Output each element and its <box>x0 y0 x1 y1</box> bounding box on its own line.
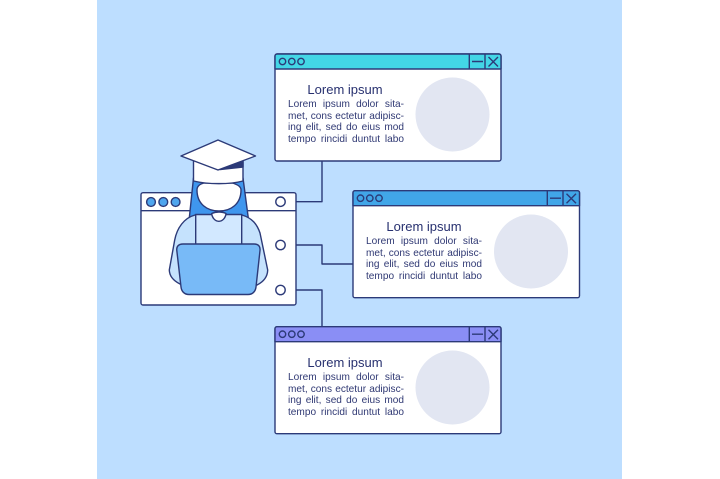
card 2 body text: Lorem ipsum dolor sita- <box>366 236 482 247</box>
mortarboard <box>181 140 256 170</box>
card 1 body text: ing elit, sed do eius mod <box>288 122 404 133</box>
card 3 body text <box>288 372 404 418</box>
card 3 text <box>288 355 404 418</box>
card 1 body text <box>288 99 404 144</box>
window card 1 <box>275 54 501 161</box>
card 2 body text: tempo rincidi duntut labo <box>366 270 482 282</box>
cap shadow <box>220 162 243 170</box>
card 2 body text <box>366 236 482 282</box>
torso <box>196 214 242 244</box>
main browser window <box>141 193 296 305</box>
window card 2 <box>353 191 580 298</box>
card 2 body text: ing elit, sed do eius mod <box>366 259 482 270</box>
card 3 heading: Lorem ipsum <box>307 355 383 370</box>
face <box>197 183 241 211</box>
card 3 body text: Lorem ipsum dolor sita- <box>288 372 404 383</box>
arms and shoulders <box>169 215 268 285</box>
graduate student figure <box>169 140 268 294</box>
card 2 heading: Lorem ipsum <box>386 219 462 234</box>
card 2 text <box>366 219 482 282</box>
card 1 body text: tempo rincidi duntut labo <box>288 134 404 144</box>
card 3 body text: tempo rincidi duntut labo <box>288 406 404 418</box>
card 1 text <box>288 82 404 144</box>
card 2 body text: met, cons ectetur adipisc- <box>366 248 482 258</box>
neck <box>212 212 226 221</box>
hair <box>189 178 248 218</box>
cap base <box>194 160 243 184</box>
laptop <box>177 244 260 294</box>
connector lines <box>285 161 353 326</box>
card 3 body text: ing elit, sed do eius mod <box>288 395 404 406</box>
card 3 body text: met, cons ectetur adipisc- <box>288 384 404 394</box>
window card 3 <box>275 327 501 434</box>
card 1 body text: met, cons ectetur adipisc- <box>288 110 404 122</box>
background panel <box>97 0 622 479</box>
card 1 heading: Lorem ipsum <box>307 82 383 97</box>
card 1 body text: Lorem ipsum dolor sita- <box>288 99 404 110</box>
